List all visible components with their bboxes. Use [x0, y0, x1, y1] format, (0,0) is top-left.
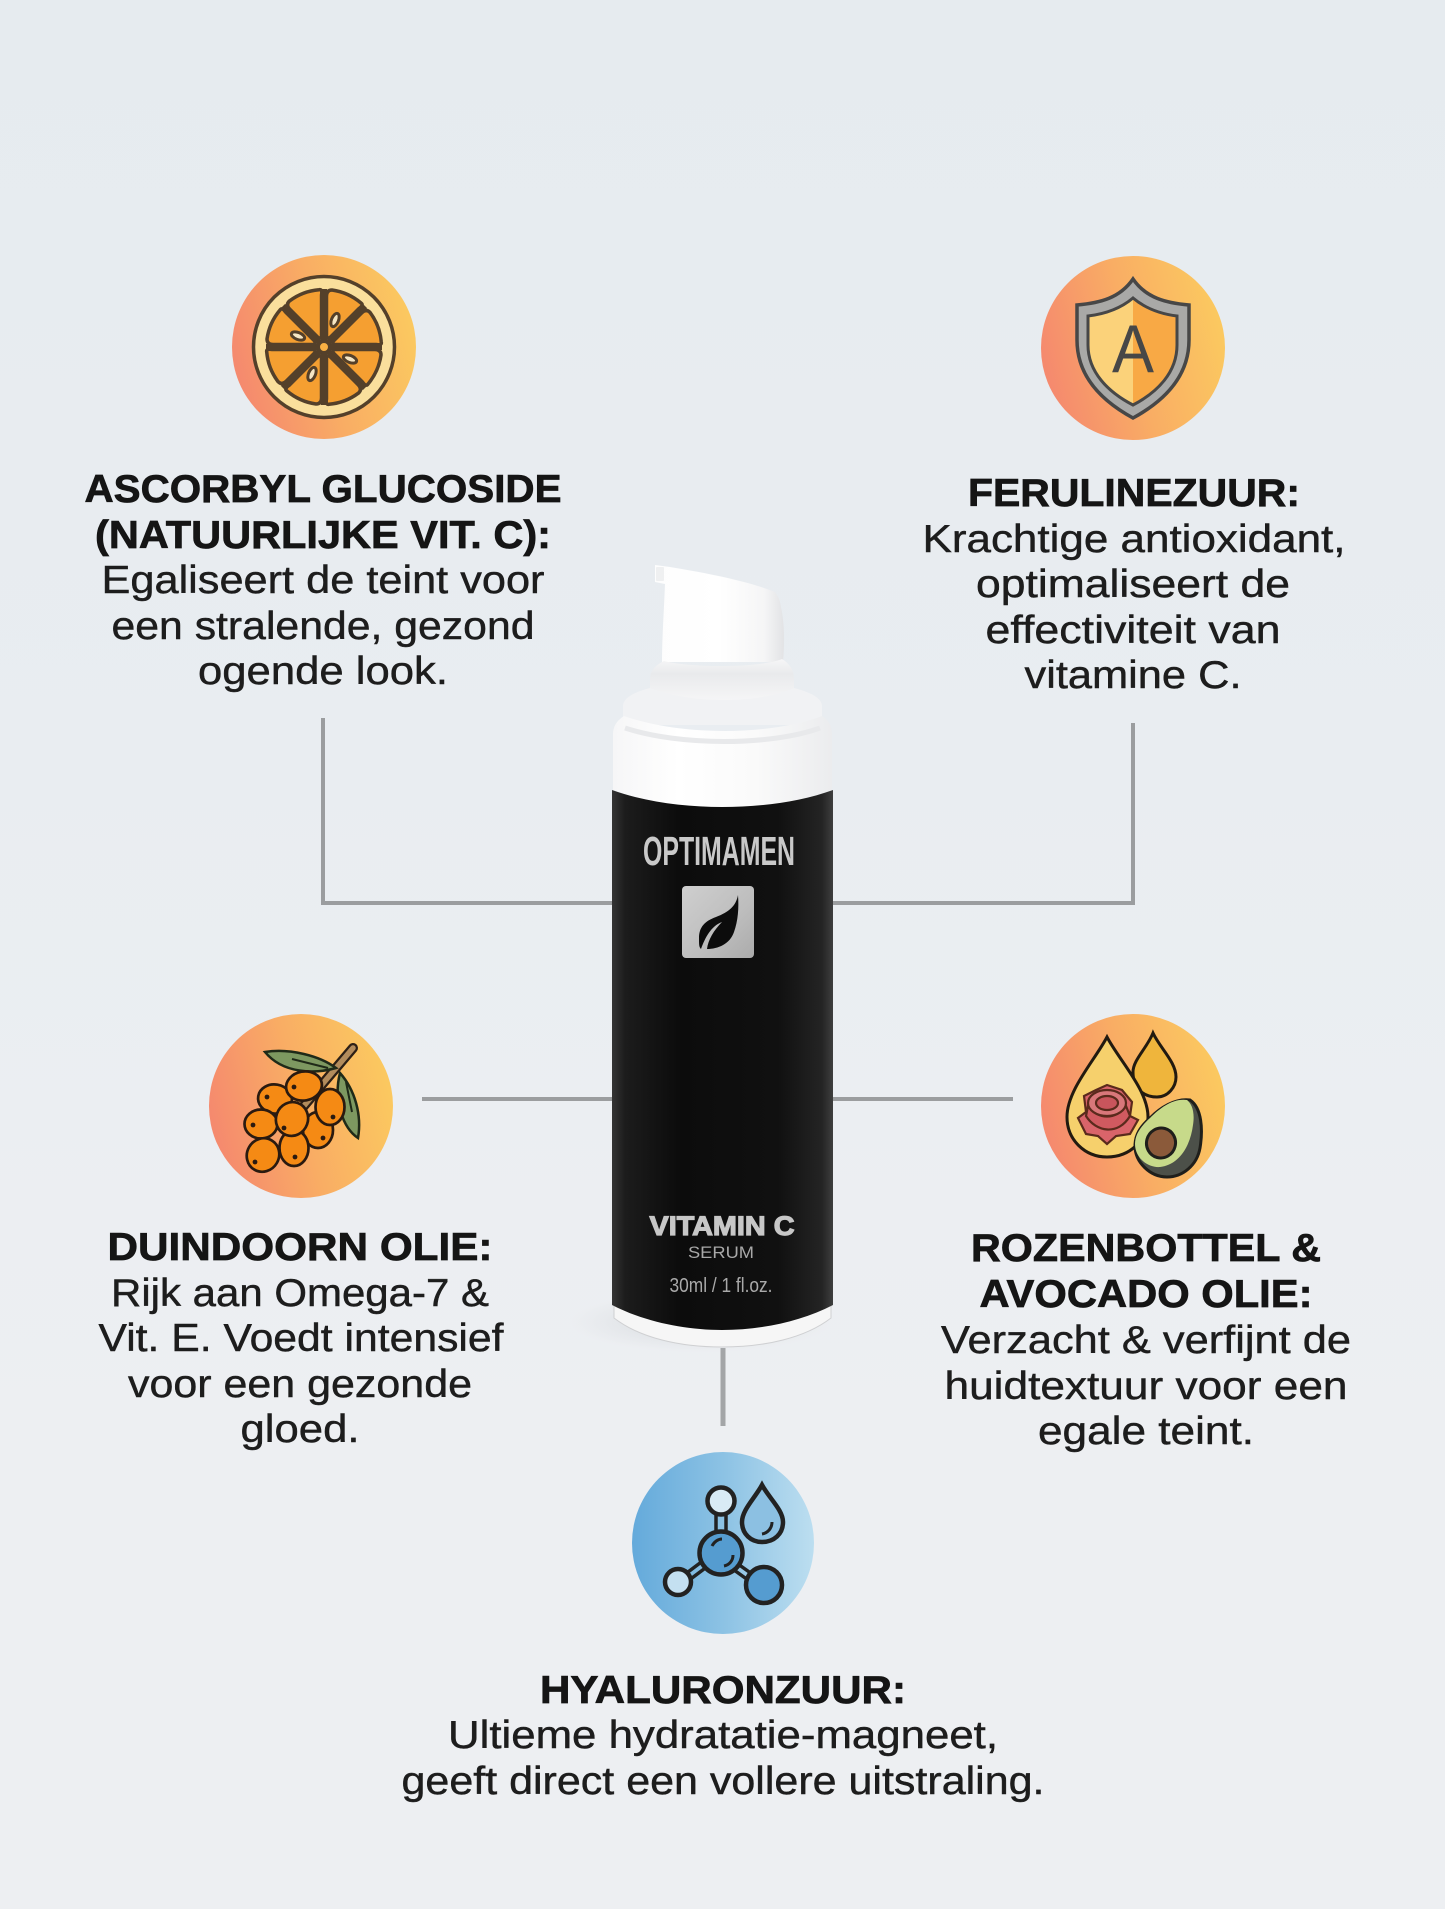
- text block: ferulinezuur: FERULINEZUUR:: [968, 472, 1300, 515]
- icon: orange slice: [232, 255, 416, 439]
- text block: duindoorn olie: Rijk aan Omega-7 &: [111, 1272, 489, 1315]
- text block: duindoorn olie: [98, 1226, 504, 1451]
- bottle label body: [612, 790, 833, 1330]
- text block: ascorbyl glucoside: [84, 468, 562, 693]
- icon: sea buckthorn berries: [209, 1014, 393, 1198]
- leaf logo: [682, 886, 754, 958]
- text block: ferulinezuur: effectiviteit van: [986, 609, 1280, 652]
- brand name: OPTIMAMEN: [643, 828, 795, 874]
- bottle base: [614, 1300, 831, 1347]
- text block: ascorbyl glucoside: ASCORBYL GLUCOSIDE: [84, 468, 562, 511]
- product name: VITAMIN C: [650, 1211, 794, 1241]
- text block: ascorbyl glucoside: (NATUURLIJKE VIT. C):: [95, 514, 551, 557]
- text block: ferulinezuur: optimaliseert de: [976, 563, 1290, 606]
- text block: duindoorn olie: gloed.: [240, 1408, 360, 1451]
- text block: ascorbyl glucoside: Egaliseert de teint voor: [102, 559, 544, 602]
- text block: ascorbyl glucoside: een stralende, gezond: [112, 605, 534, 648]
- cap: [613, 716, 832, 808]
- text block: rozenbottel and avocado olie: huidtextuur voor een: [944, 1365, 1348, 1408]
- text block: rozenbottel and avocado olie: [941, 1227, 1351, 1453]
- text block: hyaluronzuur: Ultieme hydratatie-magneet,: [448, 1714, 998, 1757]
- text block: rozenbottel and avocado olie: ROZENBOTTEL &: [971, 1227, 1321, 1270]
- text block: ferulinezuur: vitamine C.: [1024, 654, 1242, 697]
- text block: rozenbottel and avocado olie: AVOCADO OLIE:: [980, 1273, 1312, 1316]
- text block: duindoorn olie: voor een gezonde: [128, 1363, 472, 1406]
- text block: ferulinezuur: [922, 472, 1346, 697]
- text block: ascorbyl glucoside: ogende look.: [198, 650, 448, 693]
- cap shoulder: [623, 688, 822, 725]
- text block: hyaluronzuur: geeft direct een vollere uitstraling.: [402, 1760, 1044, 1803]
- product bottle: [570, 565, 833, 1352]
- text block: duindoorn olie: Vit. E. Voedt intensief: [98, 1317, 504, 1360]
- text block: ferulinezuur: Krachtige antioxidant,: [922, 518, 1346, 561]
- text block: rozenbottel and avocado olie: Verzacht & verfijnt de: [941, 1319, 1351, 1362]
- product type: SERUM: [688, 1243, 754, 1262]
- icon: hyaluronic molecule: [632, 1452, 814, 1634]
- text block: rozenbottel and avocado olie: egale teint.: [1038, 1410, 1254, 1453]
- icon: rose and avocado oil: [1041, 1014, 1225, 1198]
- icon: shield: [1041, 256, 1225, 440]
- text block: hyaluronzuur: HYALURONZUUR:: [540, 1669, 906, 1712]
- nozzle tip: [656, 567, 664, 581]
- volume: 30ml / 1 fl.oz.: [670, 1275, 772, 1297]
- pump nozzle: [655, 565, 784, 662]
- text block: hyaluronzuur: [402, 1669, 1044, 1803]
- connector lines: [323, 718, 1133, 1426]
- text block: duindoorn olie: DUINDOORN OLIE:: [108, 1226, 492, 1269]
- pump collar: [650, 659, 794, 702]
- icon: shield: A: [1112, 311, 1155, 387]
